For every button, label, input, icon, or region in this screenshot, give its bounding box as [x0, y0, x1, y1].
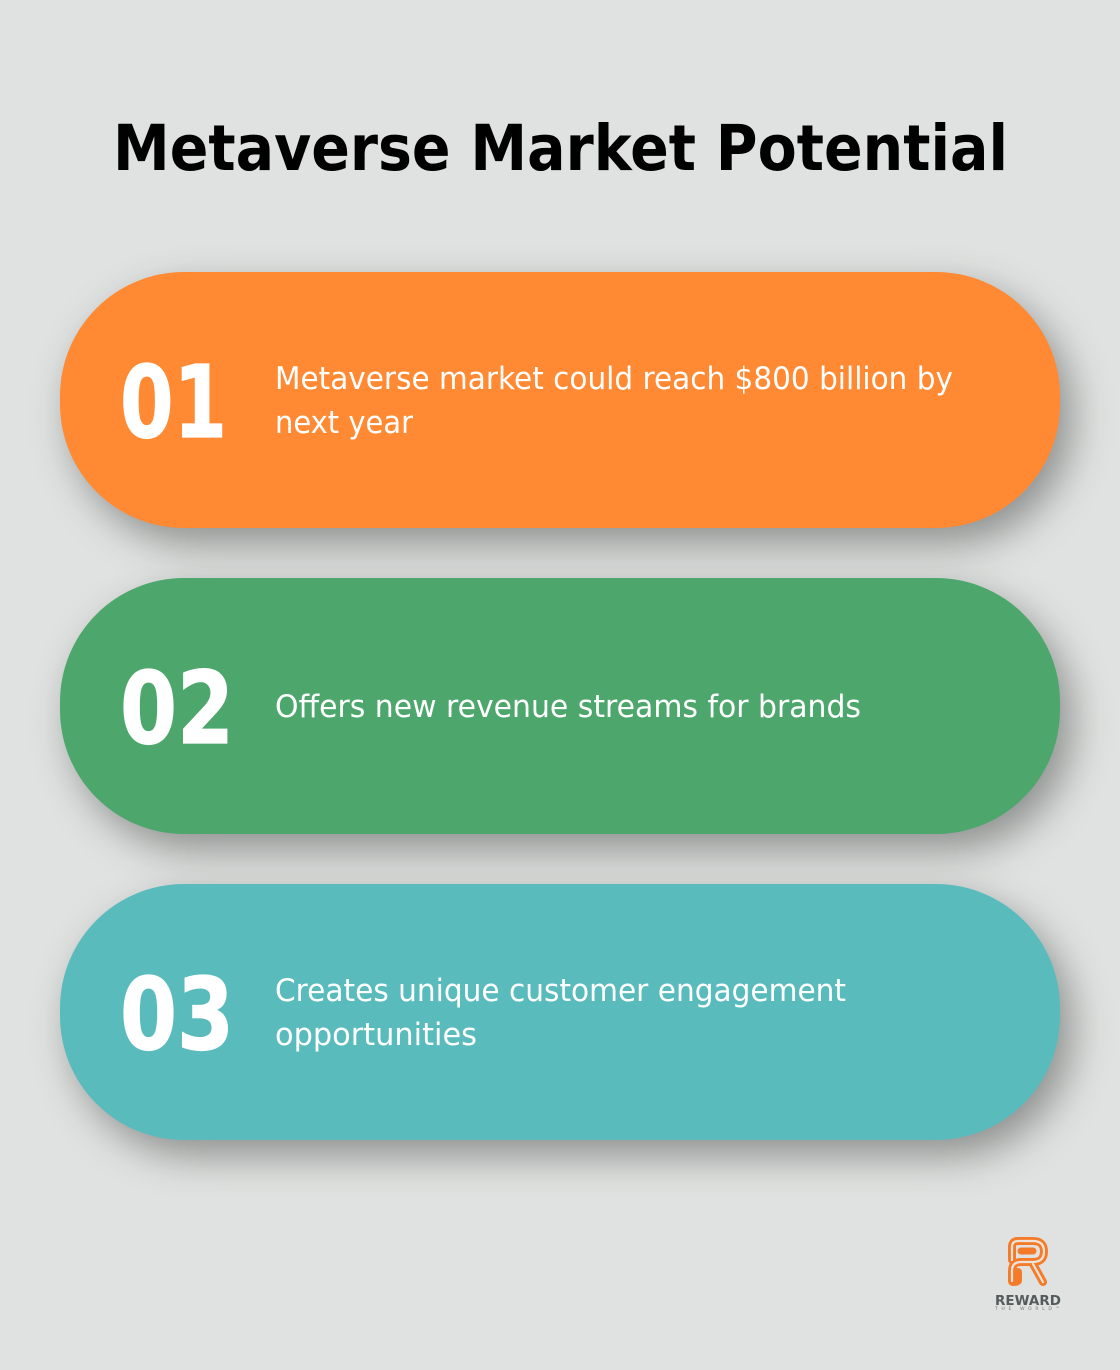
text: revenue streams: Offers new revenue streams for brands: [275, 689, 861, 725]
text: market size: Metaverse market could reach $800 billion by: [275, 361, 953, 397]
text: customer engagement: [275, 973, 846, 1053]
number 03: 03: [120, 956, 234, 1073]
icon: R mark: [1012, 1241, 1044, 1282]
tagline: THE WORLD™: [994, 1306, 1060, 1312]
text: market size: next year: [275, 405, 413, 441]
text: customer engagement: opportunities: [275, 1017, 477, 1053]
panel: customer engagement: [60, 884, 1072, 1156]
wordmark: REWARD: [995, 1294, 1061, 1309]
panel: market size: [60, 272, 1072, 544]
title: Metaverse Market Potential: [113, 111, 1008, 185]
panel: revenue streams: [60, 578, 1072, 850]
number 01: 01: [120, 344, 227, 461]
text: market size: [275, 361, 953, 441]
logo: Reward the World: [994, 1241, 1061, 1312]
text: customer engagement: Creates unique customer engagement: [275, 973, 846, 1009]
number 02: 02: [120, 650, 234, 767]
